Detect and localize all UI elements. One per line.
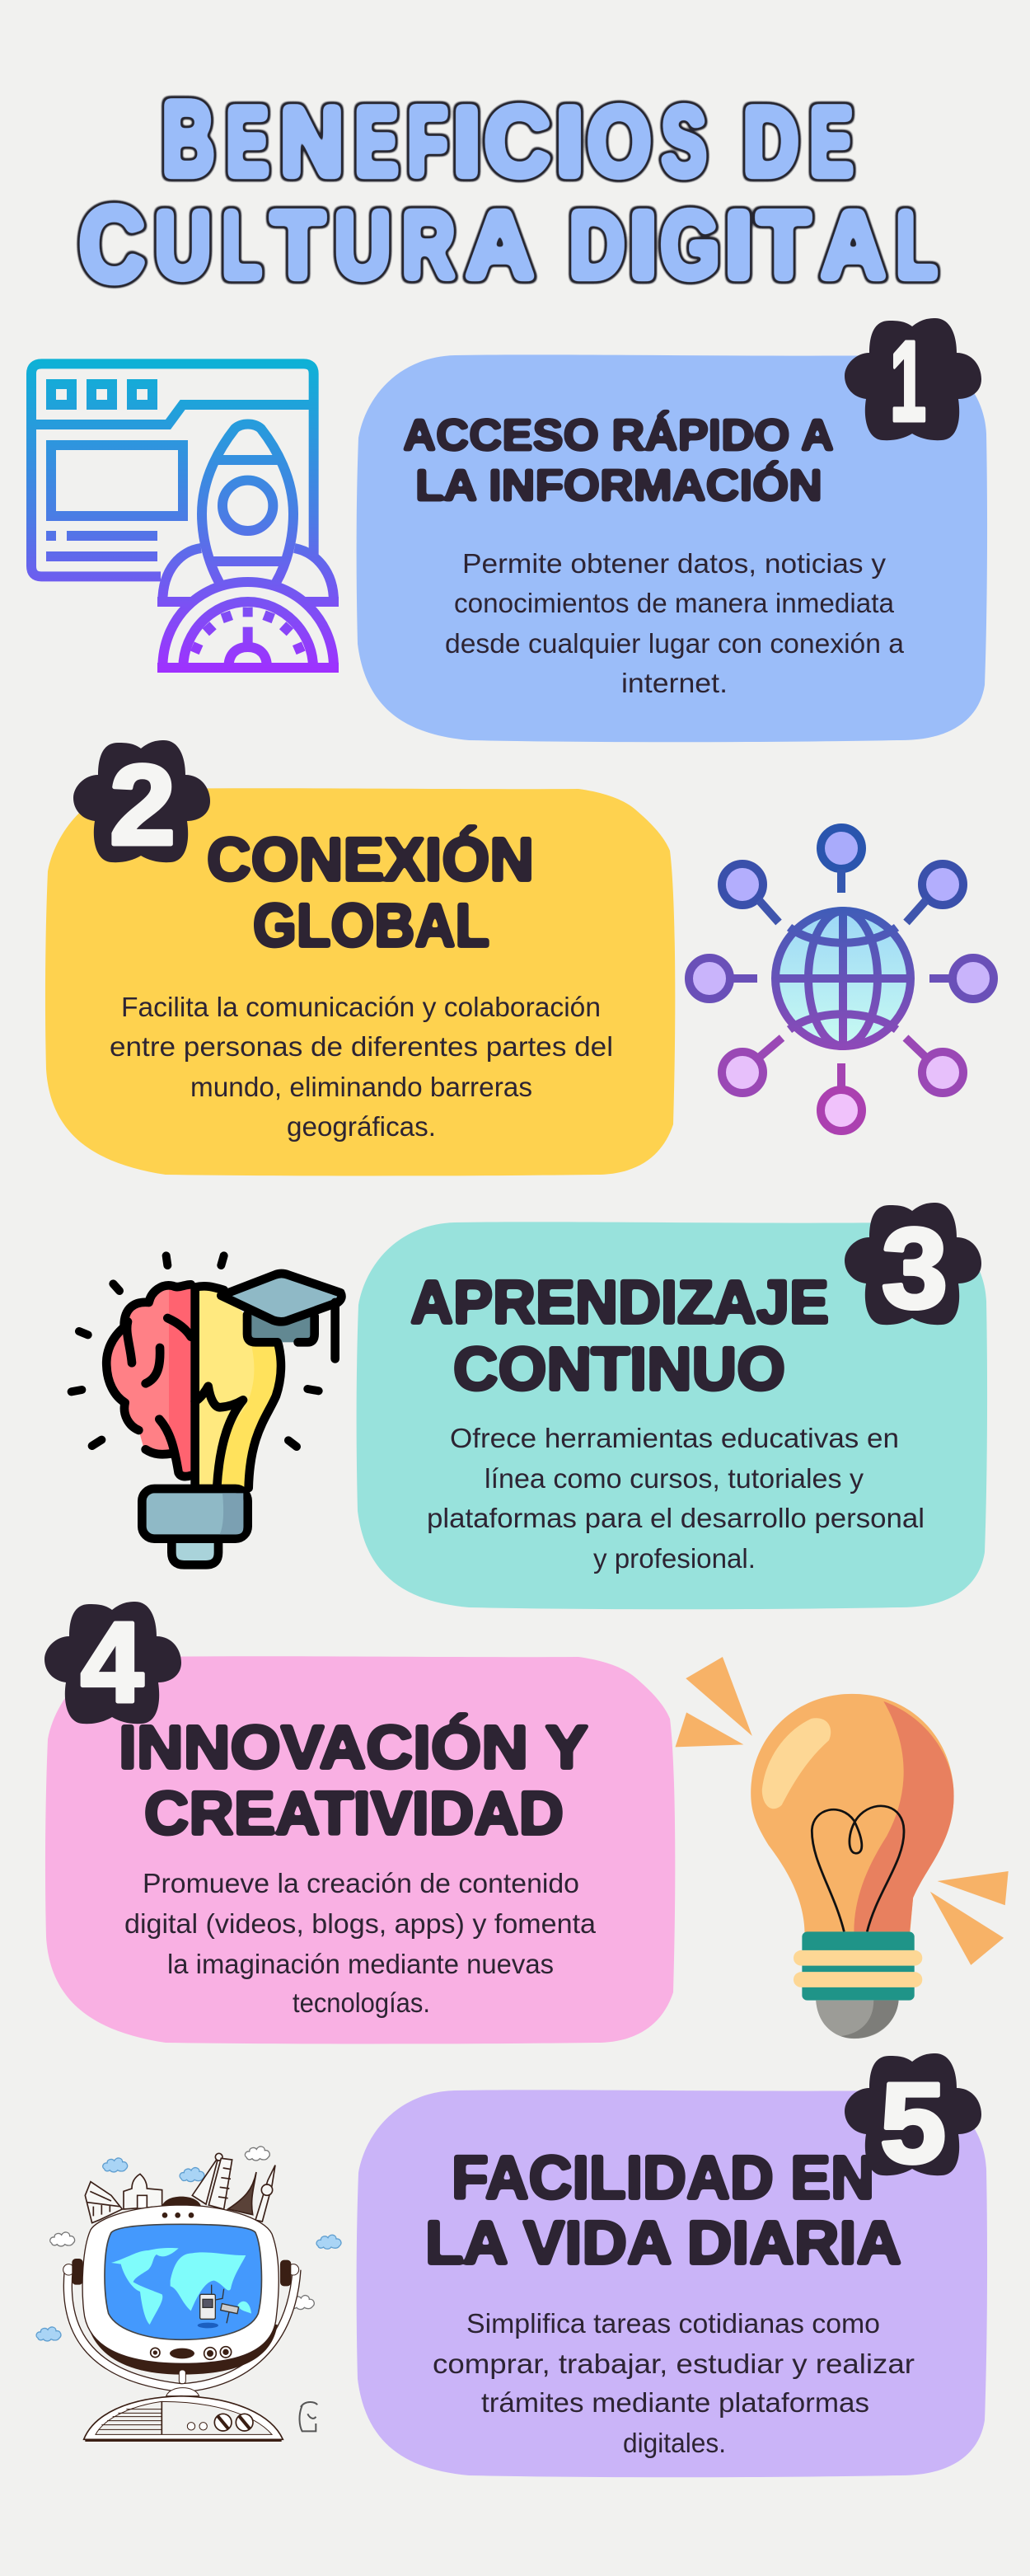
title: E	[227, 87, 269, 197]
title: D	[743, 87, 798, 197]
tv screen	[105, 2224, 261, 2339]
network nodes	[689, 828, 994, 1131]
card background	[357, 2090, 987, 2477]
body text: entre personas de diferentes partes del	[110, 1031, 613, 1062]
body text: trámites mediante plataformas	[481, 2387, 869, 2418]
title: A	[821, 191, 886, 298]
icon: globe network	[689, 828, 994, 1131]
tv base	[84, 2370, 283, 2441]
body text: y profesional.	[593, 1543, 756, 1574]
icon: browser window and rocket	[31, 364, 339, 668]
body text: la imaginación mediante nuevas	[167, 1949, 554, 1979]
heading: INNOVACIÓN Y	[119, 1713, 588, 1781]
landmarks	[85, 2153, 275, 2223]
panel: aprendizaje continuo	[357, 1203, 987, 1609]
body text: internet.	[621, 668, 728, 698]
number badge 5: 5	[880, 2060, 946, 2187]
body text: Facilita la comunicación y colaboración	[121, 992, 601, 1022]
title: T	[271, 191, 325, 298]
tv stand arc	[68, 2269, 297, 2388]
body text	[124, 1868, 597, 2018]
body text: mundo, eliminando barreras	[190, 1072, 532, 1102]
clouds	[36, 2147, 341, 2341]
world map	[111, 2248, 251, 2325]
tv controls	[151, 2212, 232, 2359]
body text: desde cualquier lugar con conexión a	[445, 628, 905, 659]
small robot	[198, 2285, 239, 2328]
body text	[110, 992, 613, 1142]
title: I	[555, 87, 584, 197]
body text: Ofrece herramientas educativas en	[450, 1423, 899, 1453]
heading: CONTINUO	[453, 1335, 785, 1403]
number badge 4: 4	[81, 1599, 143, 1726]
body text	[427, 1423, 925, 1574]
body text: comprar, trabajar, estudiar y realizar	[433, 2348, 915, 2379]
title: B	[162, 78, 214, 199]
title: S	[662, 87, 706, 197]
title: F	[408, 87, 447, 197]
heading	[403, 411, 834, 510]
title: U	[335, 191, 391, 298]
body text: Promueve la creación de contenido	[143, 1868, 579, 1898]
title: O	[588, 87, 651, 197]
body text: digitales.	[623, 2428, 726, 2458]
title	[79, 78, 937, 304]
body text: digital (videos, blogs, apps) y fomenta	[124, 1908, 597, 1939]
small figure	[300, 2402, 317, 2431]
heading: APRENDIZAJE	[410, 1268, 829, 1336]
number badge 1	[845, 318, 981, 445]
body text: tecnologías.	[293, 1987, 430, 2018]
heading	[207, 825, 534, 960]
heading	[119, 1713, 588, 1847]
number badge 2	[73, 740, 210, 869]
title: N	[280, 87, 344, 197]
title: G	[661, 191, 719, 298]
heading: ACCESO RÁPIDO A	[403, 411, 834, 460]
heading: CONEXIÓN	[207, 825, 534, 894]
number badge 5	[845, 2053, 981, 2187]
body text: plataformas para el desarrollo personal	[427, 1503, 925, 1533]
heading	[425, 2143, 901, 2277]
title: L	[897, 191, 937, 298]
body text: geográficas.	[287, 1111, 436, 1142]
heading: GLOBAL	[253, 891, 489, 960]
card background	[45, 788, 675, 1175]
body text: línea como cursos, tutoriales y	[485, 1463, 864, 1494]
heading: CREATIVIDAD	[144, 1779, 564, 1847]
body text: conocimientos de manera inmediata	[454, 588, 895, 618]
card background	[45, 1656, 675, 2044]
number badge 3	[845, 1203, 981, 1332]
tv dome	[162, 2197, 201, 2207]
title: E	[810, 87, 853, 197]
heading	[410, 1268, 829, 1403]
body text	[445, 548, 905, 698]
title: A	[466, 191, 532, 298]
body text: Permite obtener datos, noticias y	[462, 548, 887, 579]
title: T	[757, 191, 810, 298]
title: D	[569, 191, 625, 298]
icon: brain light bulb with graduation cap	[72, 1255, 341, 1565]
title: I	[724, 191, 753, 298]
title: C	[485, 87, 550, 197]
title: L	[222, 191, 261, 298]
panel: innovación y creatividad	[44, 1599, 675, 2044]
body text: Simplifica tareas cotidianas como	[466, 2308, 880, 2339]
heading: LA VIDA DIARIA	[425, 2208, 901, 2277]
title: E	[355, 87, 398, 197]
globe	[775, 911, 911, 1046]
number badge 4	[44, 1599, 181, 1726]
icon: orange light bulb	[676, 1657, 1009, 2039]
title: U	[155, 191, 211, 298]
card background	[357, 1222, 987, 1609]
panel: facilidad en la vida diaria	[357, 2053, 987, 2477]
card background	[357, 354, 987, 742]
title: C	[79, 184, 145, 304]
icon: retro tv with world map	[36, 2147, 341, 2441]
tv body	[85, 2314, 278, 2375]
title: R	[402, 191, 455, 298]
panel: conexión global	[45, 740, 675, 1175]
title: I	[452, 87, 481, 197]
number badge 2: 2	[110, 742, 176, 869]
body text	[433, 2308, 915, 2458]
number badge 1: 1	[890, 318, 926, 445]
title: I	[629, 191, 658, 298]
heading: FACILIDAD EN	[452, 2143, 874, 2212]
heading: LA INFORMACIÓN	[415, 461, 822, 510]
panel: acceso rápido	[357, 318, 987, 742]
number badge 3: 3	[882, 1205, 948, 1332]
